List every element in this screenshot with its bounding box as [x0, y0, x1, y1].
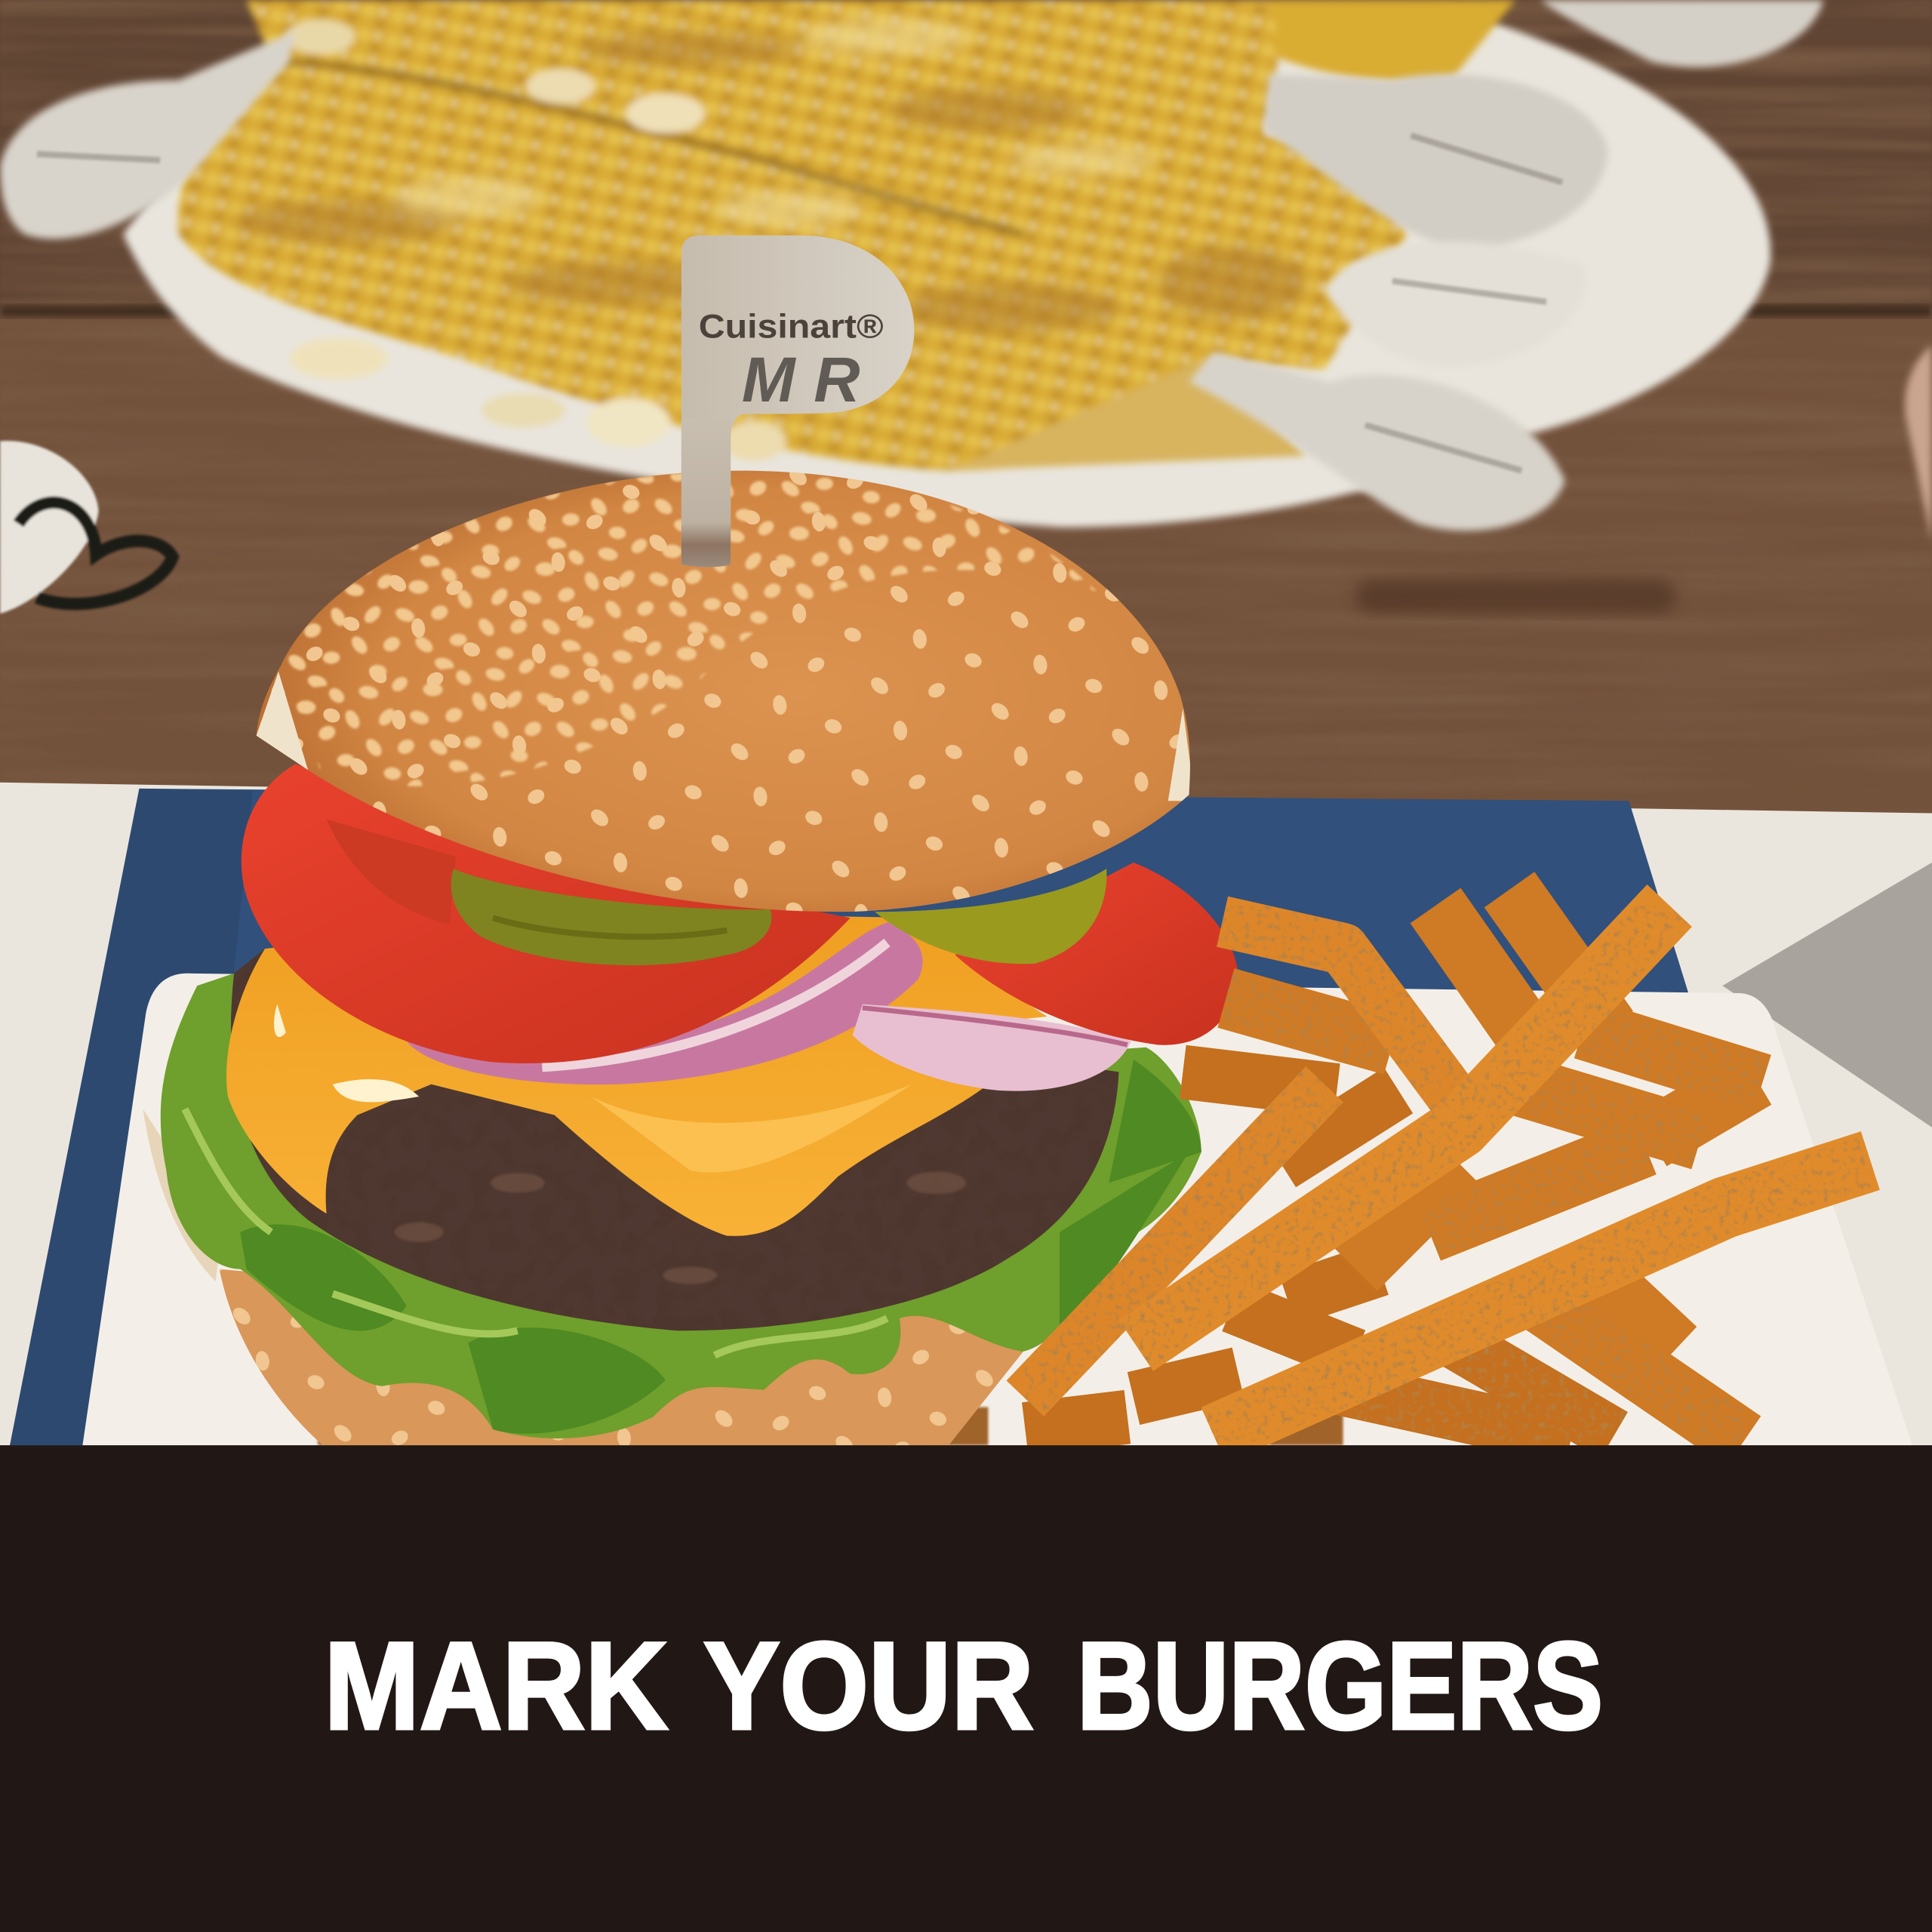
pickles: [451, 869, 1106, 965]
serving plate of corn: [0, 0, 1823, 531]
red onion rings: [407, 921, 1131, 1091]
sauce marks: [318, 1407, 1343, 1445]
title: BURGERS: [1077, 1617, 1603, 1755]
pick engravings: [37, 136, 1562, 471]
fries surface seasoning: [1025, 906, 1870, 1441]
beef patty: [231, 949, 1118, 1331]
photo: burger and fries on a table: [0, 0, 1932, 1445]
square white plate: [82, 974, 1912, 1445]
french fries: [1025, 890, 1870, 1441]
corn picks: [0, 0, 1823, 531]
top sesame bun: [247, 468, 1208, 924]
placemat: [0, 783, 1932, 1445]
bottom bun: [143, 1109, 1025, 1445]
front layer of fries: [1025, 921, 1466, 1398]
pick logo text: Cuisinart®: [699, 308, 884, 345]
pick and cord at left edge: [0, 441, 173, 614]
title: MARK: [324, 1617, 668, 1755]
handwritten initials: M R: [742, 343, 860, 415]
corn cobs: [178, 0, 1515, 471]
wooden table background: [0, 0, 1932, 814]
tomato slices: [242, 764, 1238, 1063]
marker pick flag: [681, 235, 914, 567]
back layer of fries: [1025, 1072, 1614, 1439]
melted cheese: [226, 912, 1048, 1236]
serving knife: [1722, 863, 1932, 1128]
title: YOUR: [703, 1617, 1034, 1755]
lettuce: [161, 974, 1201, 1438]
title: [324, 1617, 1603, 1755]
dark caption band: [0, 1445, 1932, 1932]
white oval plate: [123, 22, 1770, 528]
corn char and cheese crumbs: [234, 20, 1306, 333]
glass at right edge: [1905, 345, 1932, 542]
